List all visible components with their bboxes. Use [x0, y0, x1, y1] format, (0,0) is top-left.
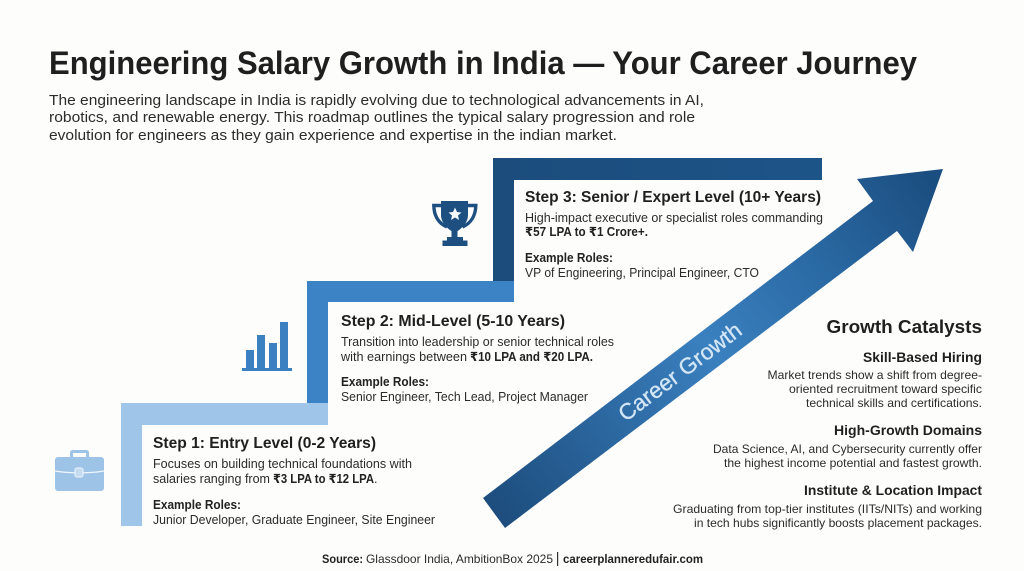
- intro paragraph: robotics, and renewable energy. This roadmap outlines the typical salary progression and role: [49, 109, 695, 126]
- catalyst: skill-based hiring: technical skills and certifications.: [806, 396, 982, 410]
- step 1 description: [153, 457, 412, 486]
- source footer: Source:: [322, 552, 363, 566]
- step 1 heading: Step 1: Entry Level (0-2 Years): [153, 435, 376, 452]
- catalyst: high-growth domains: Data Science, AI, and Cybersecurity currently offer: [713, 442, 982, 456]
- step 1 example roles: Junior Developer, Graduate Engineer, Site Engineer: [153, 513, 435, 527]
- catalyst: skill-based hiring: Skill-Based Hiring: [863, 349, 982, 365]
- arrow label: Career Growth: [614, 317, 747, 426]
- step 1 description: salaries ranging from: [153, 472, 270, 486]
- step 1 text: [153, 435, 435, 527]
- step 2 example roles: Example Roles:: [341, 375, 429, 389]
- growth arrow: [483, 169, 943, 528]
- source footer: [322, 552, 703, 566]
- title: Engineering Salary Growth in India — Your Career Journey: [49, 45, 917, 81]
- catalyst: institute and location impact: Institute & Location Impact: [804, 482, 982, 498]
- step 1 example roles: [153, 498, 435, 527]
- source footer: careerplanneredufair.com: [563, 552, 703, 566]
- step 3 description: ₹57 LPA to ₹1 Crore+.: [525, 225, 648, 239]
- step 3 description: High-impact executive or specialist roles commanding: [525, 211, 823, 225]
- step 3 heading: Step 3: Senior / Expert Level (10+ Years): [525, 189, 821, 206]
- step 3 example roles: [525, 251, 759, 280]
- catalyst: high-growth domains: [713, 422, 982, 470]
- catalyst: skill-based hiring: oriented recruitment toward specific: [789, 382, 982, 396]
- step 3 example roles: VP of Engineering, Principal Engineer, CTO: [525, 266, 759, 280]
- step 2 text: [340, 313, 614, 404]
- staircase step 2: [307, 281, 514, 403]
- step 3 text: [525, 189, 823, 280]
- step 1 example roles: Example Roles:: [153, 498, 241, 512]
- catalyst: skill-based hiring: Market trends show a shift from degree-: [768, 368, 982, 382]
- step 2 example roles: [341, 375, 588, 404]
- catalyst: institute and location impact: in tech hubs significantly boosts placement packages.: [694, 516, 982, 530]
- staircase step 1: [121, 403, 328, 526]
- icon: briefcase: [55, 450, 104, 491]
- step 3 description: [525, 211, 823, 239]
- panel: growth catalysts: [673, 317, 982, 530]
- staircase step 3: [493, 158, 822, 281]
- step 1 description: ₹3 LPA to ₹12 LPA: [273, 472, 374, 486]
- intro paragraph: evolution for engineers as they gain experience and expertise in the indian market.: [49, 127, 617, 144]
- step 3 example roles: Example Roles:: [525, 251, 613, 265]
- step 2 description: ₹10 LPA and ₹20 LPA.: [470, 350, 593, 364]
- step 2 description: Transition into leadership or senior technical roles: [341, 335, 614, 349]
- catalyst: skill-based hiring: [768, 349, 982, 410]
- icon: bar chart: [242, 322, 292, 371]
- step 2 heading: Step 2: Mid-Level (5-10 Years): [341, 313, 565, 330]
- icon: trophy: [434, 201, 476, 246]
- step 2 example roles: Senior Engineer, Tech Lead, Project Manager: [341, 390, 588, 404]
- catalyst: institute and location impact: [673, 482, 982, 530]
- catalyst: high-growth domains: High-Growth Domains: [834, 422, 982, 438]
- step 1 description: Focuses on building technical foundations with: [153, 457, 412, 471]
- step 2 description: [340, 335, 614, 364]
- source footer: Glassdoor India, AmbitionBox 2025: [366, 552, 553, 566]
- catalyst: institute and location impact: Graduating from top-tier institutes (IITs/NITs) and working: [673, 502, 982, 516]
- catalyst: high-growth domains: the highest income potential and fastest growth.: [724, 456, 982, 470]
- catalysts heading: Growth Catalysts: [826, 317, 982, 337]
- step 2 description: with earnings between: [340, 350, 467, 364]
- intro paragraph: [49, 92, 704, 144]
- step 1 description: .: [374, 472, 377, 486]
- intro paragraph: The engineering landscape in India is rapidly evolving due to technological advancements in AI,: [49, 92, 704, 109]
